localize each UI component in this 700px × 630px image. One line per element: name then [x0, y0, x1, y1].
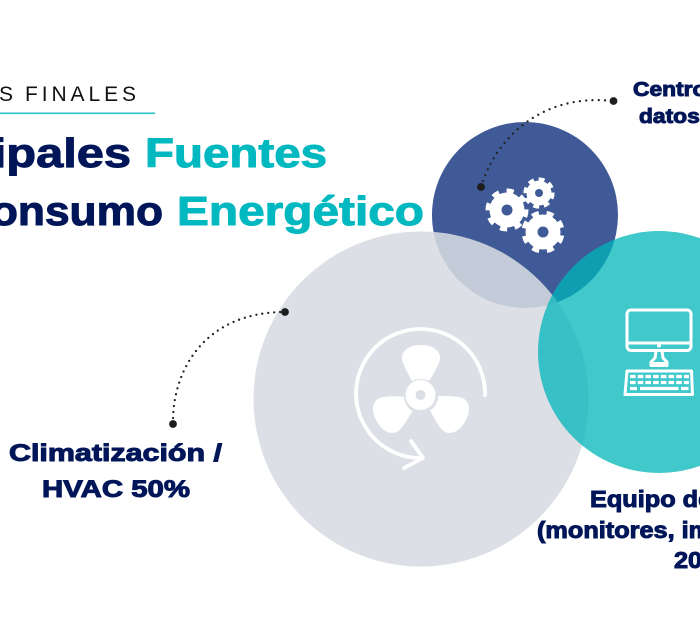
circle: office equipment — [538, 231, 700, 473]
label: HVAC: Climatización / — [9, 440, 222, 467]
title: Fuentes — [145, 130, 327, 176]
section label: usos finales: FINALES — [25, 83, 136, 106]
label: office equipment — [537, 487, 700, 574]
dotted connector: HVAC — [169, 308, 289, 428]
icon: fan — [356, 329, 485, 468]
icon: computer and keyboard — [625, 310, 692, 394]
dotted connector: data centers — [477, 97, 617, 191]
circle: data centers — [432, 122, 618, 308]
label: HVAC — [9, 440, 222, 503]
icon: gears — [488, 179, 566, 255]
label: HVAC: HVAC 50% — [42, 476, 190, 503]
title — [0, 130, 424, 235]
label: data centers — [633, 78, 700, 128]
circle: HVAC — [254, 232, 588, 566]
section label: usos finales — [0, 83, 155, 114]
title: Energético — [177, 188, 424, 234]
